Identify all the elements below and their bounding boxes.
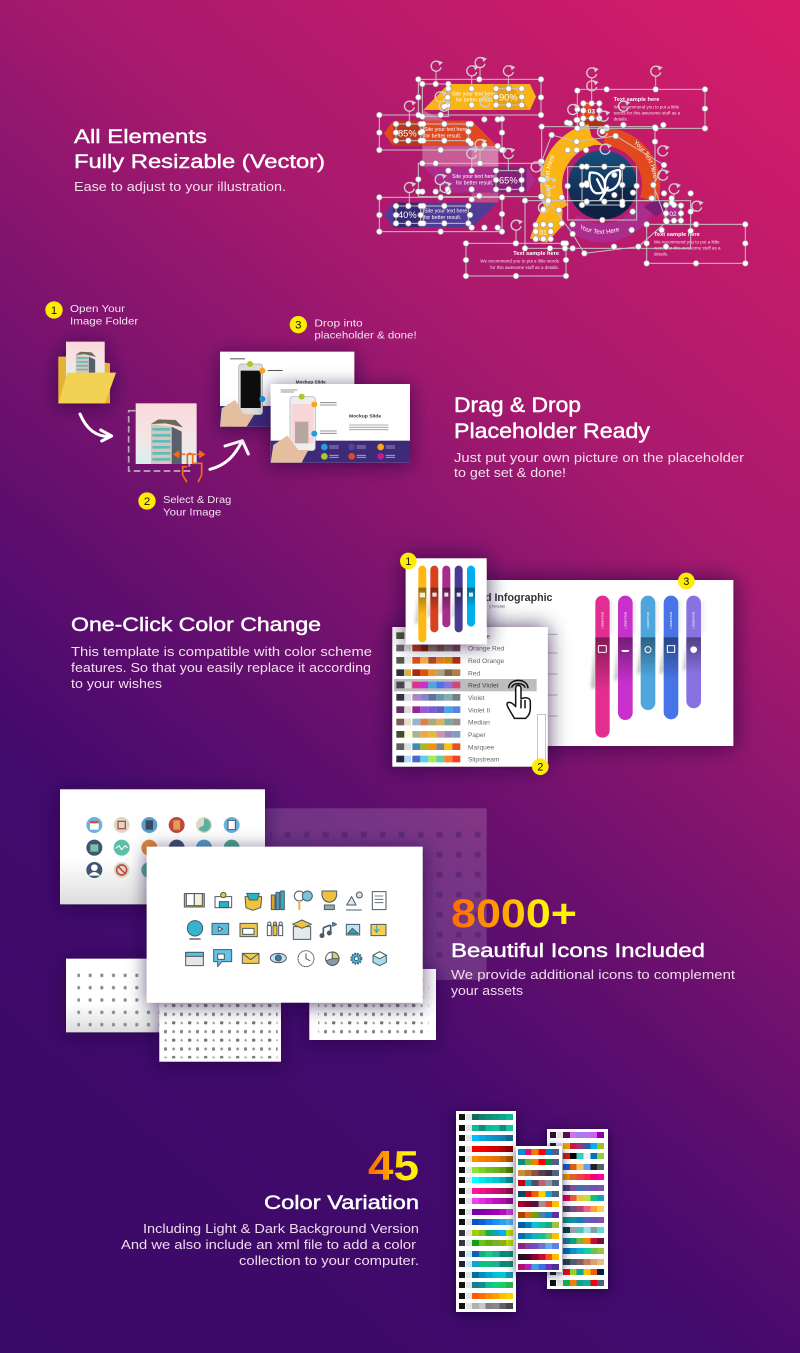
panel: color scheme menu: Red Orange bbox=[468, 658, 505, 665]
badge 1: 1 bbox=[405, 556, 411, 568]
big number: 45: 45 bbox=[368, 1142, 419, 1189]
text block: bottom right: details. bbox=[654, 252, 668, 257]
step 1 badge and label: 1 bbox=[51, 305, 57, 317]
ring chart: Your Text Here bbox=[634, 140, 656, 178]
sheet: small glyphs left bbox=[66, 959, 160, 1032]
step 3 badge and label: 3 bbox=[295, 320, 301, 332]
title: all elements fully resizable: Fully Resizable (Vector) bbox=[74, 152, 325, 173]
card: original palette bbox=[406, 558, 487, 644]
text: color variation description: collection to your computer. bbox=[239, 1254, 419, 1268]
text: color scheme description: features. So that you easily replace it according bbox=[71, 661, 371, 675]
text block: bottom center: for this awesome stuff as a details. bbox=[490, 265, 559, 270]
translucent fold panels bbox=[422, 110, 498, 203]
selection frames and handles bbox=[379, 57, 745, 276]
step 2 badge and label: Your Image bbox=[163, 507, 221, 518]
panel: color scheme menu: Marquee bbox=[468, 744, 495, 751]
step 2 badge and label bbox=[138, 492, 231, 518]
icon: folder with picture bbox=[58, 342, 116, 403]
slide: recolored infographic: d Infographic bbox=[485, 592, 553, 604]
text block: top right bbox=[614, 97, 681, 122]
pill: blue bbox=[664, 596, 678, 719]
banner: orange 85%: 85% bbox=[398, 129, 417, 139]
step 3 badge and label: Drop into bbox=[314, 318, 363, 329]
icon: drag hand bbox=[174, 452, 204, 482]
banner: yellow 90% bbox=[423, 84, 536, 110]
panel: color scheme menu: Slipstream bbox=[468, 757, 500, 764]
step 2 badge and label: 2 bbox=[144, 496, 150, 508]
pill: purple bbox=[686, 596, 701, 708]
banner: orange 85% bbox=[384, 121, 497, 146]
icon row 1 bbox=[184, 891, 386, 910]
arrow: folder to image bbox=[80, 414, 112, 441]
panel: color scheme menu: Violet bbox=[468, 695, 485, 702]
sheet: colored outline icons bbox=[147, 847, 423, 1003]
pill: sky blue: LOREM IPSUM bbox=[648, 612, 650, 628]
text: color scheme description bbox=[71, 645, 372, 691]
icon: leaves bbox=[589, 170, 620, 201]
building image bbox=[136, 403, 197, 464]
panel: color scheme demo bbox=[392, 553, 733, 775]
text block: top right: Text sample here bbox=[614, 97, 659, 103]
banner: yellow 90%: for better result. bbox=[456, 98, 493, 104]
panel: color scheme menu: Red Violet bbox=[468, 683, 499, 690]
banner: indigo 40%: 40% bbox=[398, 210, 417, 220]
heading: drag and drop bbox=[454, 394, 651, 443]
heading: beautiful icons: Beautiful Icons Included bbox=[451, 940, 705, 962]
text: placeholder description: to get set & done! bbox=[454, 466, 566, 480]
ring chart: Your Text Here bbox=[580, 224, 620, 234]
text: placeholder description bbox=[454, 451, 744, 480]
title: all elements fully resizable: All Elements bbox=[74, 127, 207, 148]
pill: purple: LOREM IPSUM bbox=[694, 612, 696, 628]
banner: yellow 90%: Site your text here bbox=[452, 91, 495, 97]
text block: bottom center: Text sample here bbox=[513, 251, 559, 257]
ring chart: 02 bbox=[669, 211, 677, 218]
palette sheet: left bbox=[456, 1111, 516, 1312]
palette sheet: center bbox=[516, 1146, 562, 1272]
step 3 badge and label: placeholder & done! bbox=[314, 331, 417, 342]
pill: magenta bbox=[595, 596, 610, 738]
pill: violet bbox=[618, 596, 633, 720]
text: placeholder description: Just put your own picture on the placeholder bbox=[454, 451, 744, 465]
icon: pointing hand cursor bbox=[507, 680, 530, 718]
text: additional icons bbox=[451, 968, 736, 998]
pill: magenta: LOREM IPSUM bbox=[603, 612, 605, 628]
icon row 3 bbox=[186, 950, 386, 967]
text: color scheme description: to your wishes bbox=[71, 677, 162, 691]
icon row 2 bbox=[187, 920, 386, 939]
placeholder dashed frame bbox=[129, 411, 189, 471]
banner: orange 85%: for better result. bbox=[424, 133, 461, 139]
text block: bottom center bbox=[480, 251, 560, 270]
panel: color scheme menu: Median bbox=[468, 720, 490, 727]
banner: purple 65% bbox=[423, 167, 536, 193]
banner: orange 85%: Site your text here bbox=[424, 127, 467, 133]
badge 2 bbox=[532, 758, 549, 775]
palette sheet: right bbox=[547, 1129, 608, 1289]
step 1 badge and label: Image Folder bbox=[70, 316, 139, 327]
step 3 badge and label bbox=[290, 316, 417, 342]
banner: purple 65%: 65% bbox=[499, 175, 518, 185]
ring chart bbox=[530, 100, 680, 243]
panel: color scheme menu bbox=[392, 627, 548, 767]
slide: mockup back bbox=[220, 352, 354, 427]
slide: mockup back: Mockup Slide bbox=[296, 379, 326, 384]
ring chart: 03 bbox=[588, 108, 595, 115]
banner: indigo 40%: for better result. bbox=[424, 215, 461, 221]
sheet: flat round icons bbox=[60, 789, 265, 904]
pill: sky blue bbox=[641, 596, 655, 710]
text block: top right: details. bbox=[614, 117, 628, 122]
text block: bottom right: Text sample here bbox=[654, 232, 700, 238]
badge 3: 3 bbox=[683, 576, 689, 588]
text block: top right: We recommend you to put a little bbox=[614, 105, 680, 110]
banner: yellow 90%: 90% bbox=[499, 93, 518, 103]
panel: color scheme menu: Orange bbox=[468, 633, 490, 640]
heading: color variation: Color Variation bbox=[264, 1192, 419, 1214]
panel: color scheme menu: Paper bbox=[468, 732, 487, 739]
text block: bottom right: We recommend you to put a little bbox=[654, 240, 720, 245]
pill: blue: LOREM IPSUM bbox=[671, 612, 673, 628]
badge 2: 2 bbox=[537, 762, 543, 774]
arrow: image to slide bbox=[210, 441, 248, 469]
badge 1 bbox=[400, 553, 417, 569]
panel: color scheme menu: Red bbox=[468, 670, 481, 677]
text: color scheme description: This template is compatible with color scheme bbox=[71, 645, 372, 659]
big number: 8000+: 8000+ bbox=[451, 892, 577, 936]
banner: indigo 40%: Site your text here bbox=[424, 209, 467, 215]
diagram: editable infographic with vector handles bbox=[376, 56, 748, 280]
heading: drag and drop: Placeholder Ready bbox=[454, 420, 651, 443]
text block: bottom right bbox=[654, 232, 721, 257]
title: all elements fully resizable bbox=[74, 127, 325, 173]
panel: drag and drop steps bbox=[45, 301, 417, 518]
step 1 badge and label bbox=[45, 301, 139, 327]
ring chart: Your Text Here bbox=[546, 156, 554, 198]
banner: purple 65%: Site your text here bbox=[452, 174, 495, 180]
step 1 badge and label: Open Your bbox=[70, 304, 126, 315]
slide: mockup front: Mockup Slide bbox=[349, 414, 381, 420]
badge 3 bbox=[678, 573, 695, 589]
banner: indigo 40% bbox=[384, 203, 497, 227]
text: color variation description: Including Light & Dark Background Version bbox=[143, 1222, 419, 1236]
text: additional icons: We provide additional icons to complement bbox=[451, 968, 736, 982]
panel: icon sheets bbox=[60, 789, 487, 1062]
panel: color scheme menu: Violet II bbox=[468, 707, 490, 714]
text: ease to adjust: Ease to adjust to your illustration. bbox=[74, 180, 286, 194]
heading: drag and drop: Drag & Drop bbox=[454, 394, 581, 417]
slide: mockup front bbox=[271, 384, 410, 463]
sheet: small glyphs middle bbox=[159, 1002, 281, 1062]
heading: one-click color change: One-Click Color Change bbox=[71, 614, 321, 636]
pill shadows bbox=[591, 642, 686, 688]
panel: color scheme menu: Orange Red bbox=[468, 646, 505, 653]
step 2 badge and label: Select & Drag bbox=[163, 495, 231, 506]
text block: bottom center: We recommend you to put a little words bbox=[480, 259, 560, 264]
banner: purple 65%: for better result. bbox=[456, 180, 493, 186]
text: color variation description bbox=[121, 1222, 419, 1268]
text block: top right: words for this awesome stuff as a bbox=[614, 111, 681, 116]
sheet: translucent solid glyphs bbox=[265, 808, 487, 980]
text block: bottom right: words for this awesome stuff as a bbox=[654, 246, 721, 251]
sheet: small glyphs right bbox=[309, 969, 436, 1040]
slide: recolored infographic: g Template bbox=[489, 605, 505, 609]
ring chart: 01 bbox=[539, 230, 547, 237]
text: additional icons: your assets bbox=[451, 984, 523, 998]
pill: violet: LOREM IPSUM bbox=[625, 612, 627, 628]
slide: recolored infographic bbox=[485, 573, 733, 746]
text: color variation description: And we also include an xml file to add a color bbox=[121, 1238, 416, 1252]
